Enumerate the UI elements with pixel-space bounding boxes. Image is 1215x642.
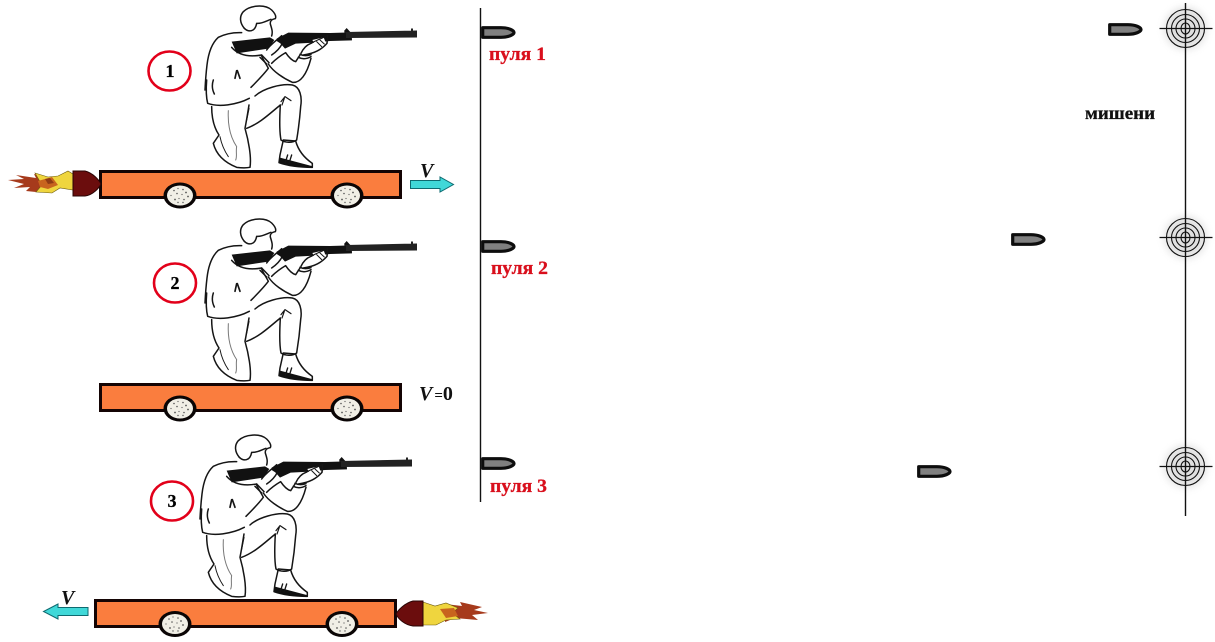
flying bullet 2 bbox=[1013, 235, 1044, 244]
number 3 in red circle bbox=[151, 482, 193, 520]
velocity arrow V to the left bbox=[44, 587, 88, 619]
target 2 bbox=[1160, 216, 1212, 258]
flying bullet 1 bbox=[1110, 25, 1141, 34]
label bullet 1: пуля 1 bbox=[489, 44, 546, 65]
velocity arrow V to the right: V bbox=[420, 160, 435, 182]
label bullet 3: пуля 3 bbox=[490, 476, 547, 497]
number 2 in red circle bbox=[154, 264, 196, 302]
number 2 in red circle: 2 bbox=[170, 273, 180, 293]
bullet 3 at start bbox=[483, 459, 514, 468]
bullet 2 at start bbox=[483, 242, 514, 251]
number 1 in red circle bbox=[148, 52, 190, 90]
bullet 1 at start bbox=[483, 28, 514, 37]
rocket engine flame pointing right bbox=[396, 601, 488, 626]
vertical start line bbox=[480, 8, 482, 502]
vertical target line bbox=[1184, 3, 1186, 516]
start line with bullets bbox=[480, 8, 548, 502]
velocity arrow V to the left: V bbox=[61, 587, 76, 609]
panel: scene 3 cart moving left bbox=[44, 435, 488, 637]
rocket engine flame pointing left bbox=[8, 171, 101, 196]
cart 1 bbox=[100, 172, 400, 208]
flying bullet 3 bbox=[919, 467, 950, 476]
shooter 1 bbox=[205, 6, 417, 168]
label targets: мишени bbox=[1085, 103, 1155, 123]
panel: scene 2 cart at rest bbox=[100, 219, 453, 422]
target 1 bbox=[1160, 8, 1212, 50]
targets line bbox=[1085, 3, 1212, 516]
label bullet 2: пуля 2 bbox=[491, 258, 548, 279]
shooter 2 bbox=[205, 219, 417, 381]
label V = 0: V=0 bbox=[419, 383, 453, 405]
cart 2 bbox=[100, 384, 400, 422]
target 3 bbox=[1160, 446, 1212, 488]
number 3 in red circle: 3 bbox=[168, 491, 176, 511]
velocity arrow V to the right bbox=[410, 160, 454, 192]
cart 3 bbox=[96, 600, 396, 637]
panel: scene 1 cart moving right bbox=[8, 6, 454, 209]
shooter 3 bbox=[200, 435, 412, 597]
number 1 in red circle: 1 bbox=[166, 61, 174, 81]
